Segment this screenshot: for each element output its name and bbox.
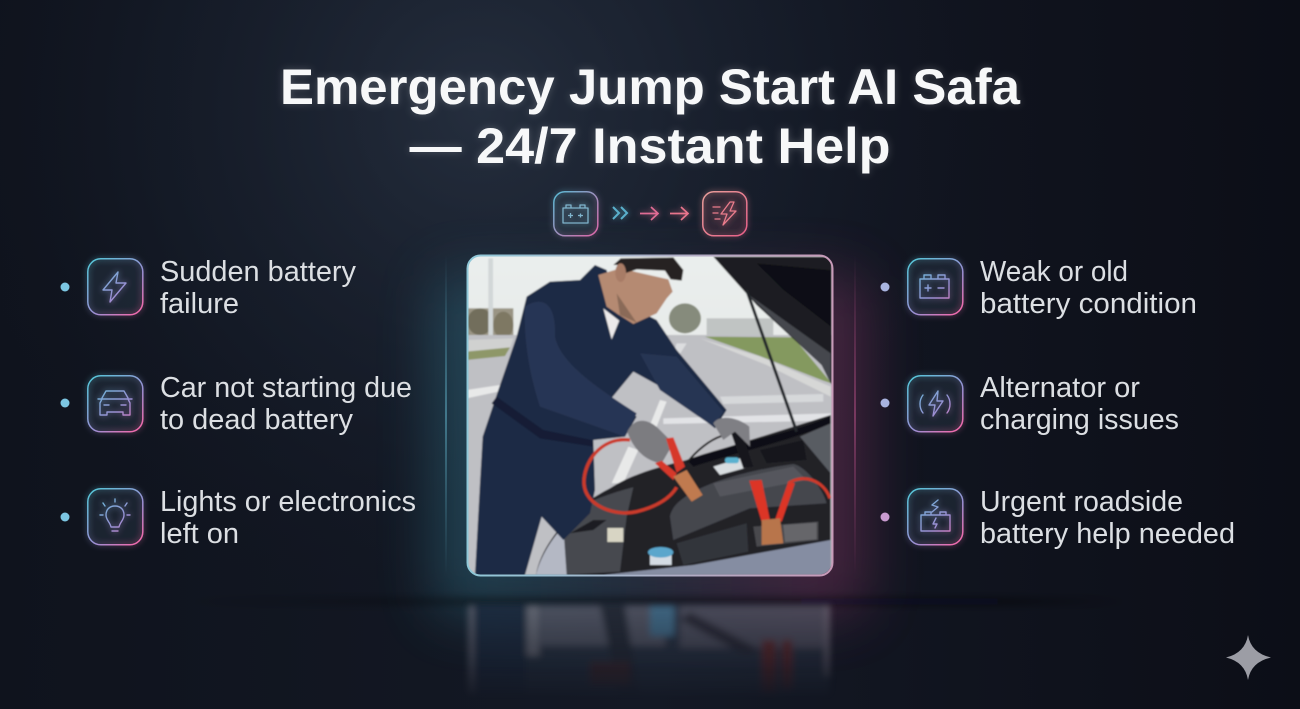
divider glow: left [445, 255, 447, 575]
title: Emergency Jump Start AI Safa [280, 59, 1021, 115]
icon: battery [554, 192, 598, 236]
title [280, 59, 1021, 174]
item: lights left on: left on [160, 518, 239, 550]
photo reflection [468, 604, 830, 700]
item: sudden battery failure: failure [160, 288, 239, 320]
item: sudden battery failure: Sudden battery [160, 256, 356, 288]
panel: left causes [60, 256, 416, 550]
car [536, 415, 831, 575]
icon: arrow one [640, 207, 658, 220]
icon: arrow two [670, 207, 688, 220]
item: alternator: charging issues [980, 404, 1179, 436]
panel: right causes [880, 256, 1235, 550]
item: sudden battery failure [60, 256, 356, 320]
cable and clamps [584, 440, 677, 513]
icon: chevrons [613, 207, 627, 219]
item: alternator: Alternator or [980, 372, 1140, 404]
man [475, 265, 727, 575]
title: — 24/7 Instant Help [410, 118, 890, 174]
item: alternator [880, 372, 1179, 436]
item: lights left on [60, 486, 416, 550]
item: weak battery: battery condition [980, 288, 1197, 320]
item: weak battery: Weak or old [980, 256, 1128, 288]
photo: mechanic jump starting a car [467, 255, 833, 575]
icon: sparkle [1226, 635, 1271, 680]
item: car not starting [60, 372, 412, 436]
item: weak battery [880, 256, 1197, 320]
icon: fast charge [703, 192, 747, 236]
item: car not starting: to dead battery [160, 404, 353, 436]
item: car not starting: Car not starting due [160, 372, 412, 404]
item: lights left on: Lights or electronics [160, 486, 416, 518]
item: urgent roadside help [880, 486, 1235, 550]
item: urgent roadside help: battery help needed [980, 518, 1235, 550]
flow: battery to jump start [554, 192, 747, 236]
hood [713, 257, 832, 385]
divider glow: right [854, 255, 856, 575]
item: urgent roadside help: Urgent roadside [980, 486, 1183, 518]
